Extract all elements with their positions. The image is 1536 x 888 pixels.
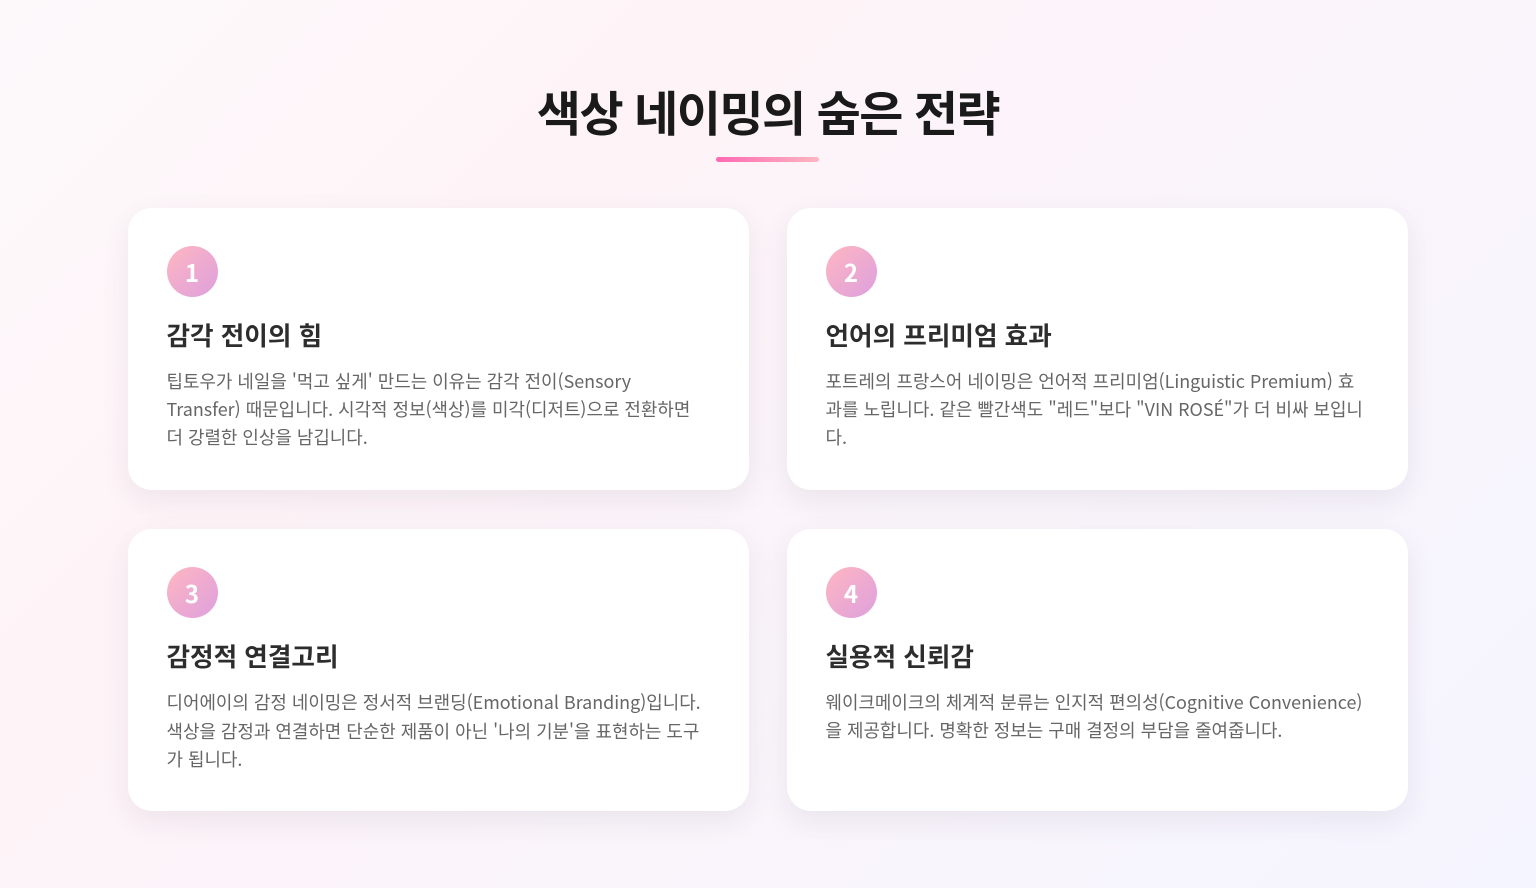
card 2 text: 과를 노립니다. 같은 빨간색도 "레드"보다 "VIN ROSÉ"가 더 비싸 보입니 [826, 396, 1363, 422]
number badge 4 [826, 567, 876, 618]
title underline [716, 157, 819, 162]
panel: card 1 [128, 208, 749, 490]
card 1 text [166, 368, 690, 450]
card 2 text: 다. [826, 424, 847, 450]
panel: card 2 [787, 208, 1408, 490]
number badge 3 [166, 567, 218, 618]
card 1 heading: 감각 전이의 힘 [166, 316, 322, 353]
card 1 text: 팁토우가 네일을 '먹고 싶게' 만드는 이유는 감각 전이(Sensory [166, 368, 631, 394]
card 4 text [826, 689, 1362, 743]
title: 색상 네이밍의 숨은 전략 [537, 75, 999, 145]
card 4 text: 을 제공합니다. 명확한 정보는 구매 결정의 부담을 줄여줍니다. [826, 717, 1282, 743]
card 2 text [826, 368, 1363, 450]
number badge 1 [166, 246, 218, 297]
card 3 text: 디어에이의 감정 네이밍은 정서적 브랜딩(Emotional Branding)입니다. [166, 689, 701, 715]
card 4 text: 웨이크메이크의 체계적 분류는 인지적 편의성(Cognitive Convenience) [826, 689, 1362, 715]
card 3 text [166, 689, 701, 772]
panel: card 3 [128, 529, 749, 811]
card 2 heading: 언어의 프리미엄 효과 [826, 316, 1052, 353]
card 4 heading: 실용적 신뢰감 [826, 637, 974, 674]
number badge 1: 1 [185, 254, 199, 289]
card 1 text: 더 강렬한 인상을 남깁니다. [166, 424, 368, 450]
number badge 2: 2 [844, 254, 858, 289]
card 3 heading: 감정적 연결고리 [166, 637, 338, 674]
card 1 text: Transfer) 때문입니다. 시각적 정보(색상)를 미각(디저트)으로 전환하면 [166, 396, 690, 422]
number badge 2 [826, 246, 876, 297]
card 2 text: 포트레의 프랑스어 네이밍은 언어적 프리미엄(Linguistic Premium) 효 [826, 368, 1354, 394]
number badge 4: 4 [844, 575, 858, 610]
number badge 3: 3 [185, 575, 199, 610]
card 3 text: 가 됩니다. [166, 746, 242, 772]
panel: card 4 [787, 529, 1408, 811]
card 3 text: 색상을 감정과 연결하면 단순한 제품이 아닌 '나의 기분'을 표현하는 도구 [166, 718, 699, 744]
